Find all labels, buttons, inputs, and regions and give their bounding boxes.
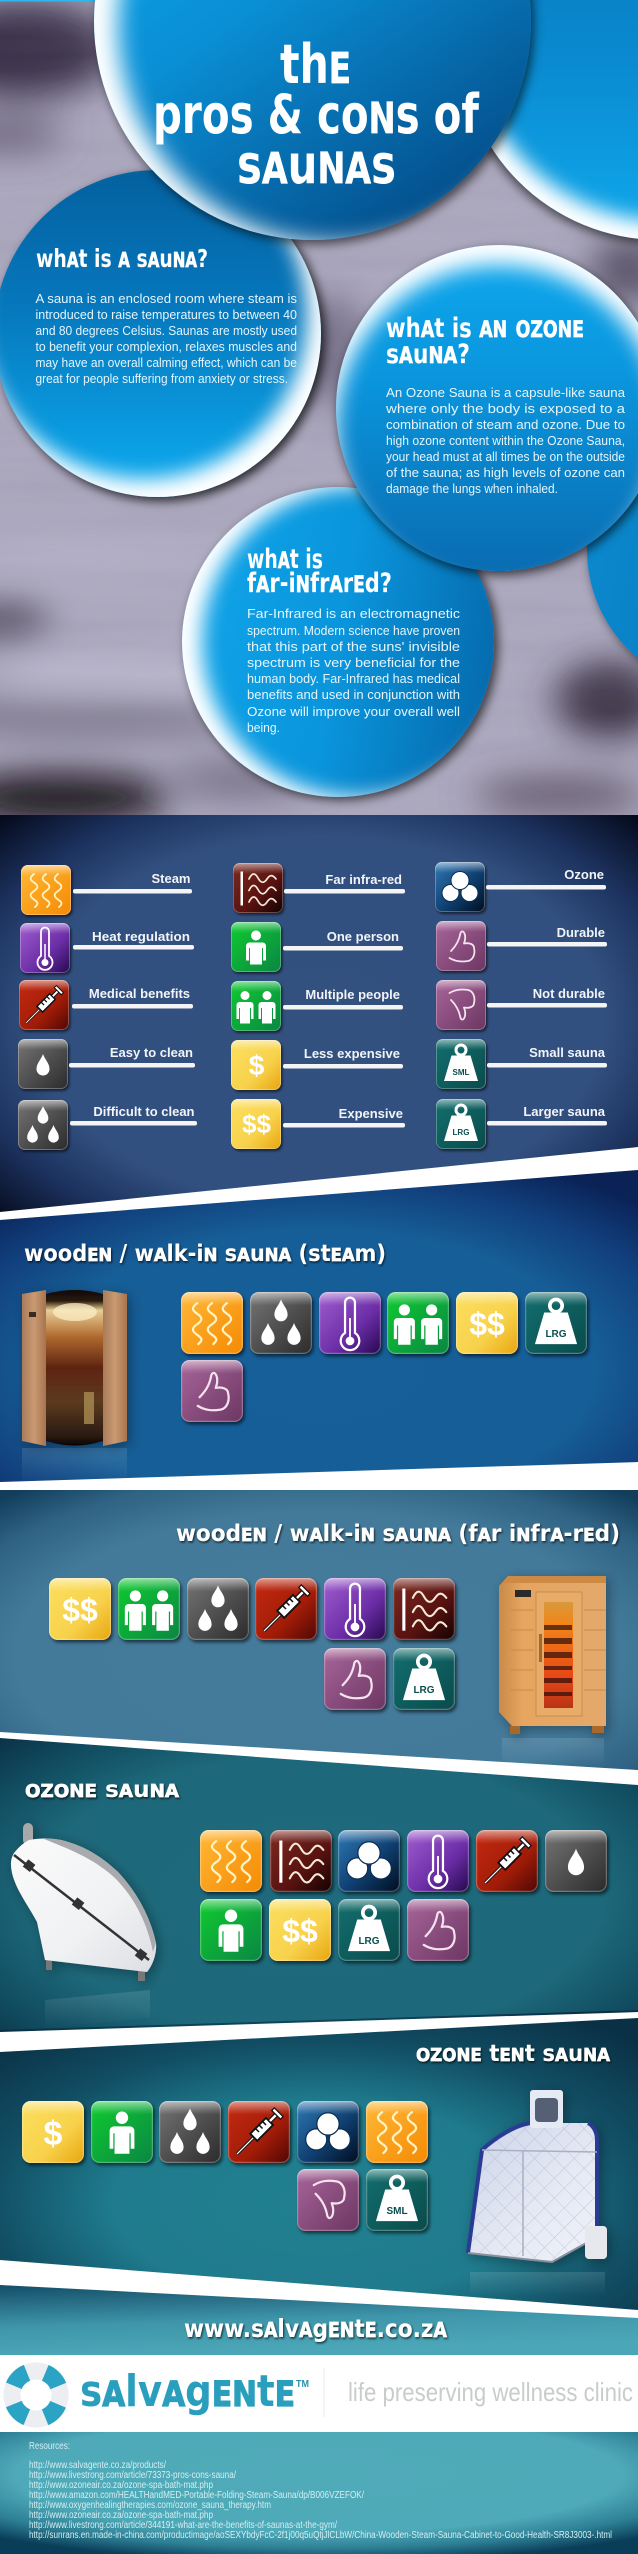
panel: resources background [0, 2432, 638, 2554]
legend item: steam [21, 865, 192, 917]
icon row: wooden steam [181, 1292, 589, 1424]
icon: expensive: $$ [62, 1592, 98, 1628]
icon: far infra-red [393, 1578, 457, 1642]
circle: what is a sauna [0, 170, 321, 497]
icon: small sauna: SML [386, 2206, 408, 2217]
circles group [0, 0, 638, 808]
legend item: expensive: $$ [242, 1109, 271, 1139]
icon: one person [200, 1899, 264, 1963]
icon: steam [200, 1830, 264, 1894]
text block: what is an ozone sauna: An Ozone Sauna is a capsule-like sauna [386, 385, 626, 400]
icon: expensive [456, 1292, 520, 1356]
text block: what is a sauna: and 80 degrees Celsius. Saunas are mostly used [36, 323, 297, 338]
icon: difficult to clean [187, 1578, 251, 1642]
website url: www.salvagente.co.za [184, 2311, 447, 2344]
legend item: less expensive: $ [249, 1050, 265, 1081]
legend item: far infra-red [233, 863, 405, 915]
text block: what is an ozone sauna: where only the body is exposed to a [385, 401, 626, 416]
image: wooden walk-in steam sauna [22, 1290, 127, 1486]
white diagonal stripe 4 [0, 2012, 638, 2052]
legend item: expensive: Expensive [339, 1106, 403, 1121]
panel: website banner background [0, 2280, 638, 2355]
text block: what is an ozone sauna: of the sauna; as high levels of ozone can [386, 465, 625, 480]
panel: wooden steam background [0, 1170, 638, 1490]
circle: title [94, 0, 531, 240]
resources list: http://www.oxygenhealingtherapies.com/ozone_sauna_therapy.htm [29, 2500, 271, 2511]
text block: what is far-infrared: that this part of the suns' invisible [247, 639, 460, 654]
text block: what is an ozone sauna: what is an ozone [386, 309, 584, 345]
circle: lower right [587, 410, 638, 690]
text block: what is far-infrared: what is [247, 540, 323, 576]
resources list: http://www.ozoneair.co.za/ozone-spa-bath-mat.php [29, 2480, 213, 2491]
icon: difficult to clean [250, 1292, 314, 1356]
text block: what is an ozone sauna: damage the lungs when inhaled. [386, 481, 558, 496]
icon: easy to clean [545, 1830, 609, 1894]
legend item: small sauna: Small sauna [529, 1045, 606, 1060]
text block: what is an ozone sauna [385, 309, 626, 496]
heading: wooden steam: wooden / walk-in sauna (steam) [24, 1238, 386, 1268]
legend item: medical benefits [19, 980, 193, 1032]
legend item: difficult to clean [18, 1100, 197, 1152]
text block: what is an ozone sauna: high ozone content within the Ozone Sauna, [386, 433, 625, 448]
legend item: ozone [435, 862, 606, 914]
trademark: TM [296, 2379, 309, 2390]
text block: what is far-infrared: Ozone will improve your overall well [247, 704, 460, 719]
text block: what is a sauna: what is a sauna? [36, 241, 208, 274]
icon: far infra-red [270, 1830, 334, 1894]
logo: lifebuoy [2, 2361, 70, 2429]
text block: what is far-infrared [247, 540, 461, 735]
circle: far-infrared [182, 487, 494, 797]
legend item: heat regulation: Heat regulation [92, 929, 190, 944]
image: ozone tent sauna [468, 2090, 607, 2296]
legend item: easy to clean: Easy to clean [110, 1045, 193, 1060]
icon: not durable [297, 2169, 361, 2233]
legend item: not durable [436, 980, 607, 1032]
resources list: Resources: [29, 2441, 70, 2452]
legend item: larger sauna: Larger sauna [523, 1104, 606, 1119]
icon: small sauna [366, 2169, 430, 2233]
resources list [29, 2441, 612, 2541]
icon: steam [366, 2101, 430, 2165]
resources list: http://www.amazon.com/HEALTHandMED-Portable-Folding-Steam-Sauna/dp/B006VZEFOK/ [29, 2490, 364, 2501]
logo wordmark: salvagente [80, 2359, 295, 2418]
icon: less expensive: $ [44, 2115, 63, 2153]
icon: difficult to clean [159, 2101, 223, 2165]
image: wooden far infra-red sauna [499, 1576, 606, 1768]
text block: what is an ozone sauna: sauna? [386, 335, 470, 371]
legend item: multiple people [231, 981, 403, 1033]
panel: wooden far infra-red background [0, 1490, 638, 1790]
icon: larger sauna [338, 1899, 402, 1963]
legend item: less expensive: Less expensive [304, 1046, 400, 1061]
icon: durable [324, 1648, 388, 1712]
legend item: steam: Steam [151, 871, 190, 886]
title: the [280, 26, 351, 98]
legend item: small sauna: SML [453, 1068, 470, 1077]
resources list: http://www.ozoneair.co.za/ozone-spa-bath-mat.php [29, 2510, 213, 2521]
legend item: durable: Durable [557, 925, 605, 940]
icon: less expensive [22, 2101, 86, 2165]
icon: multiple people [118, 1578, 182, 1642]
icon: heat regulation [407, 1830, 471, 1894]
icon: heat regulation [319, 1292, 383, 1356]
text block: what is far-infrared: Far-Infrared is an electromagnetic [247, 606, 461, 621]
legend item: larger sauna: LRG [453, 1128, 469, 1137]
title: saunas [237, 126, 396, 198]
icon: expensive: $$ [469, 1306, 505, 1342]
heading: wooden far infra-red: wooden / walk-in sauna (far infra-red) [176, 1518, 620, 1548]
text block: what is a sauna: to benefit your complexion, relaxes muscles and [36, 339, 297, 354]
text block: what is a sauna: introduced to raise temperatures to between 40 [36, 307, 297, 322]
resources list: http://www.salvagente.co.za/products/ [29, 2460, 166, 2471]
panel: smoky background [0, 0, 638, 824]
white diagonal stripe 2 [0, 1462, 638, 1490]
icon: ozone [297, 2101, 361, 2165]
legend item: one person [231, 922, 403, 974]
icon: larger sauna [393, 1648, 457, 1712]
circle: upper right [460, 0, 638, 240]
text block: what is far-infrared: spectrum. Modern science have proven [247, 623, 460, 638]
text block: what is a sauna: may have an overall calming effect, which can be [36, 355, 297, 370]
legend item: medical benefits: Medical benefits [89, 986, 190, 1001]
icon row: ozone sauna [200, 1830, 609, 1963]
icon: larger sauna: LRG [413, 1685, 435, 1696]
text block: what is an ozone sauna: combination of steam and ozone. Due to [386, 417, 625, 432]
text block: what is a sauna [36, 241, 298, 386]
text block: what is far-infrared: spectrum is very beneficial for the [247, 655, 460, 670]
icon: expensive: $$ [282, 1913, 318, 1949]
legend panel [18, 862, 607, 1152]
icon: durable [407, 1899, 471, 1963]
icon: medical benefits [255, 1578, 319, 1642]
text block: what is far-infrared: human body. Far-Infrared has medical [247, 671, 460, 686]
text block: what is a sauna: A sauna is an enclosed room where steam is [36, 291, 298, 306]
panel: ozone tent background [0, 2010, 638, 2320]
text block: what is a sauna: great for people suffering from anxiety or stress. [36, 371, 288, 386]
text block: what is far-infrared: being. [247, 720, 280, 735]
icon: durable [181, 1360, 245, 1424]
legend item: durable [436, 921, 607, 973]
text block: what is far-infrared: benefits and used in conjunction with [247, 687, 460, 702]
panel: legend background [0, 815, 638, 1225]
icon: steam [181, 1292, 245, 1356]
legend item: one person: One person [327, 929, 399, 944]
icon: expensive [269, 1899, 333, 1963]
panel: ozone sauna background [0, 1738, 638, 2055]
legend item: larger sauna [436, 1099, 607, 1151]
icon: larger sauna [525, 1292, 589, 1356]
white diagonal stripe 5 [0, 2260, 638, 2318]
icon: larger sauna: LRG [545, 1329, 567, 1340]
legend item: difficult to clean: Difficult to clean [93, 1104, 195, 1119]
image: ozone capsule sauna [11, 1823, 156, 2028]
icon row: ozone tent sauna [22, 2101, 430, 2233]
title [153, 26, 479, 198]
icon row: wooden far infra-red [49, 1578, 457, 1712]
legend item: easy to clean [18, 1039, 195, 1091]
icon: multiple people [387, 1292, 451, 1356]
icon: one person [91, 2101, 155, 2165]
legend item: small sauna [436, 1039, 607, 1091]
text block: what is an ozone sauna: your head must at all times be on the outside [386, 449, 625, 464]
icon: ozone [338, 1830, 402, 1894]
heading: ozone tent sauna: ozone tent sauna [416, 2038, 610, 2068]
heading: ozone sauna: ozone sauna [25, 1774, 179, 1804]
legend item: multiple people: Multiple people [305, 987, 400, 1002]
white diagonal stripe 1 [0, 1147, 638, 1220]
icon: medical benefits [228, 2101, 292, 2165]
white diagonal stripe 3 [0, 1732, 638, 1785]
panel: logo band [0, 2355, 638, 2432]
icon: heat regulation [324, 1578, 388, 1642]
legend item: less expensive [231, 1040, 403, 1092]
legend item: heat regulation [20, 923, 194, 975]
legend item: ozone: Ozone [564, 867, 604, 882]
icon: expensive [49, 1578, 113, 1642]
legend item: far infra-red: Far infra-red [325, 872, 402, 887]
text block: what is far-infrared: far-infrared? [247, 564, 392, 600]
legend item: not durable: Not durable [533, 986, 605, 1001]
icon: larger sauna: LRG [358, 1936, 380, 1947]
resources list: http://www.livestrong.com/article/344191-what-are-the-benefits-of-saunas-at-the-gym/ [29, 2520, 337, 2531]
resources list: http://www.livestrong.com/article/73373-pros-cons-sauna/ [29, 2470, 236, 2481]
title: pros & cons of [153, 76, 479, 148]
circle: ozone [336, 245, 638, 571]
legend item: expensive [231, 1099, 405, 1151]
icon: medical benefits [476, 1830, 540, 1894]
